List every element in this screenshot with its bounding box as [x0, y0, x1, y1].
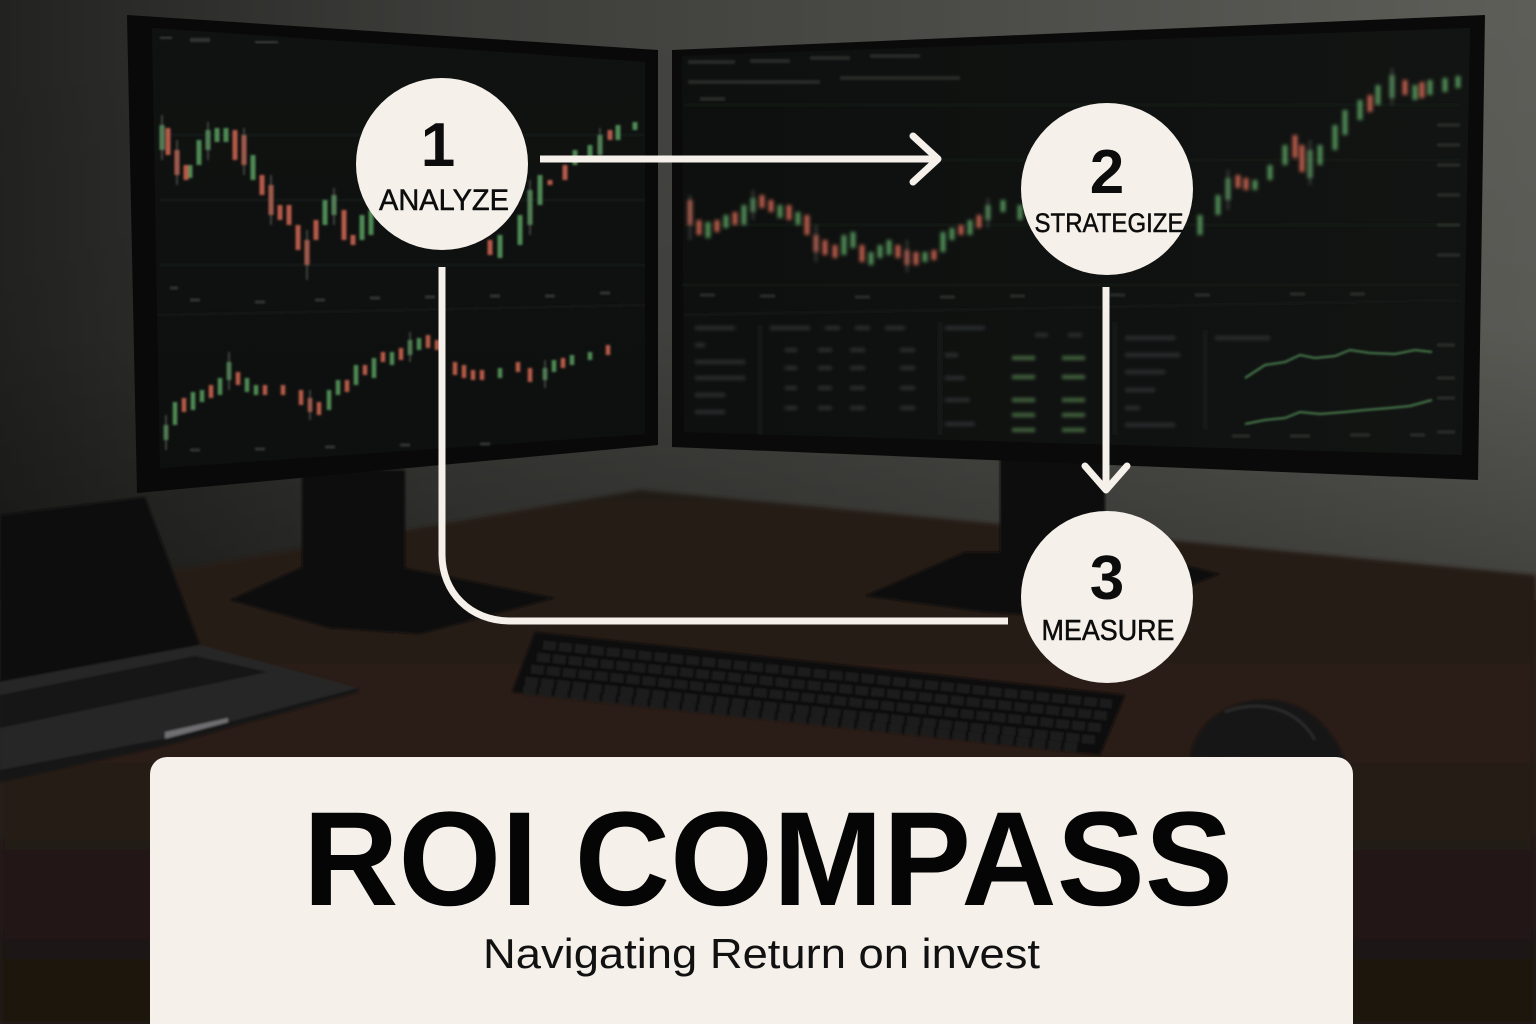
right monitor stand: [865, 455, 1220, 620]
left monitor stand: [230, 470, 555, 634]
number 3: 3: [1090, 544, 1124, 613]
right screen toolbar: [688, 56, 960, 99]
subtitle: Navigating Return on invest: [483, 930, 1040, 977]
background: desk: [0, 490, 1536, 1024]
right screen data table: [695, 322, 1270, 435]
left monitor: [127, 15, 658, 493]
right candlestick chart: [690, 68, 1458, 272]
label strategize: STRATEGIZE: [1034, 208, 1184, 238]
left screen grid: [158, 135, 645, 315]
left screen: [152, 28, 645, 468]
right monitor: [672, 15, 1485, 480]
title panel: [150, 757, 1353, 1024]
right screen axis labels: [700, 125, 1460, 436]
title: ROI COMPASS: [303, 785, 1233, 934]
step 2: strategize: [1021, 103, 1193, 275]
left upper candlestick chart: [162, 115, 635, 280]
keyboard: [512, 632, 1125, 755]
background: wall: [0, 0, 1536, 600]
number 2: 2: [1090, 138, 1124, 207]
arrow: strategize to measure: [1085, 287, 1127, 490]
right screen: [682, 28, 1470, 455]
label analyze: ANALYZE: [379, 184, 509, 217]
laptop: [0, 497, 358, 782]
right screen divider: [682, 105, 1462, 315]
left screen toolbar: [160, 37, 278, 43]
left screen axis ticks: [170, 288, 610, 450]
arrow: analyze to strategize: [540, 136, 938, 182]
label measure: MEASURE: [1042, 615, 1174, 647]
left lower candlestick chart: [166, 332, 608, 450]
step 1: analyze: [356, 78, 528, 250]
mouse: [1190, 700, 1345, 760]
right screen line charts: [1245, 350, 1432, 424]
number 1: 1: [421, 111, 455, 180]
connector: measure back to analyze: [442, 267, 1008, 621]
step 3: measure: [1021, 511, 1193, 683]
